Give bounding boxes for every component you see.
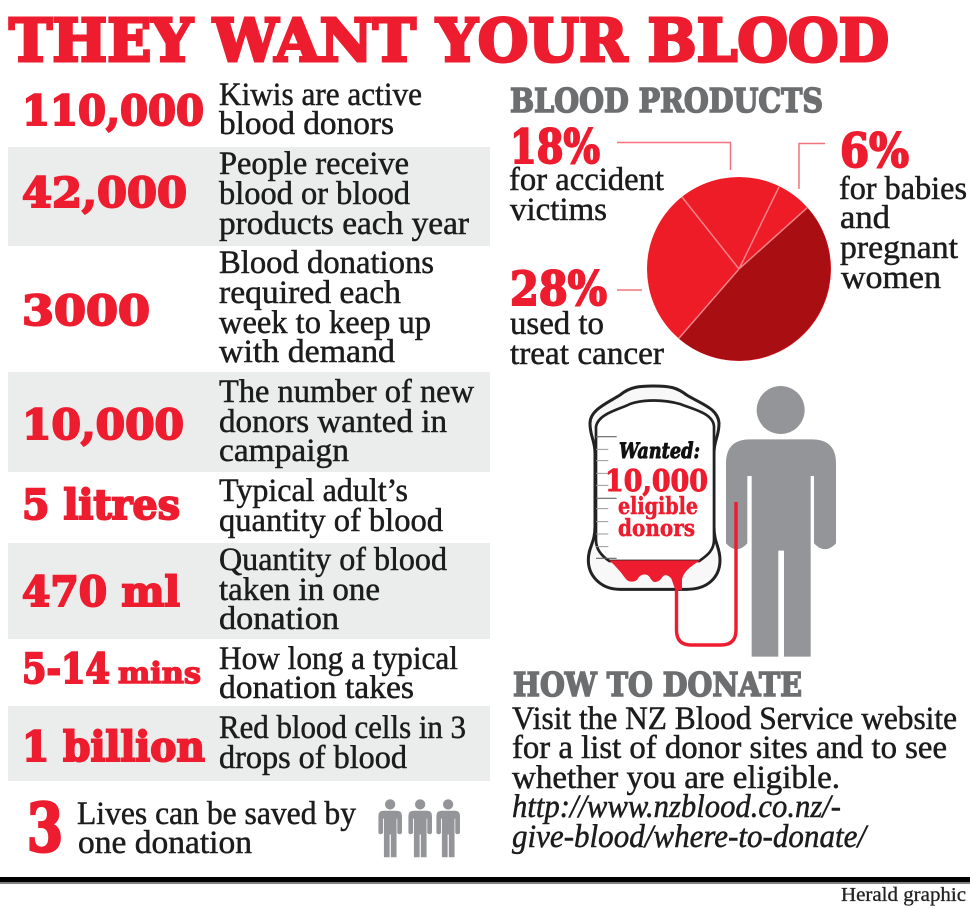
stat: new donors: The number of new: [219, 374, 474, 410]
stat: donation time: [22, 641, 458, 706]
donation instructions: for a list of donor sites and to see: [512, 730, 947, 766]
donation instructions: [512, 701, 957, 855]
callout: 28 percent: [510, 262, 664, 372]
callout: 6 percent: for babies: [839, 171, 967, 207]
stat: adult blood quantity: quantity of blood: [219, 503, 443, 539]
pie chart: [647, 177, 831, 361]
stat: lives saved: 3: [27, 789, 63, 867]
stat: adult blood quantity: 5 litres: [22, 481, 180, 529]
callout: 6 percent: women: [841, 260, 941, 296]
icon: blood bag: [588, 386, 720, 590]
blood tube: [676, 502, 736, 645]
callout: 6 percent: [799, 124, 967, 296]
stat: recipients: [8, 146, 490, 246]
stat: new donors: campaign: [219, 433, 349, 469]
callout: 28 percent: 28%: [510, 262, 607, 317]
callout: 6 percent: and: [840, 200, 891, 236]
callout: 6 percent: 6%: [840, 124, 909, 179]
stat: recipients: products each year: [219, 206, 469, 242]
heading: blood products: BLOOD PRODUCTS: [510, 81, 823, 120]
stat: red blood cells: 1 billion: [22, 723, 205, 771]
donation instructions: http://www.nzblood.co.nz/-: [512, 789, 841, 825]
stat: new donors: 10,000: [22, 401, 184, 449]
heading: how to donate: HOW TO DONATE: [513, 665, 802, 704]
stat: active donors: blood donors: [219, 106, 394, 142]
callout: 18 percent: victims: [510, 192, 607, 228]
bag label: Wanted:: [619, 438, 700, 463]
stat: lives saved: one donation: [78, 825, 252, 861]
stat: red blood cells: drops of blood: [219, 740, 407, 776]
stat: donation quantity: 470 ml: [22, 568, 180, 616]
stat: recipients: 42,000: [22, 169, 187, 217]
stat: recipients: People receive: [219, 146, 409, 182]
stat: weekly donations: with demand: [219, 334, 396, 370]
callout: 18 percent: 18%: [510, 120, 600, 175]
bag label: [605, 438, 708, 542]
stat: adult blood quantity: [22, 473, 443, 539]
callout: 28 percent: used to: [510, 306, 604, 342]
stat: donation quantity: Quantity of blood: [219, 542, 447, 578]
panel: how to donate: [512, 665, 957, 855]
stat: donation time: mins: [118, 656, 201, 690]
stat: donation quantity: [8, 542, 490, 639]
stat: adult blood quantity: Typical adult’s: [219, 473, 408, 509]
stat: weekly donations: [22, 245, 434, 370]
stat: active donors: Kiwis are active: [219, 77, 422, 113]
donation instructions: Visit the NZ Blood Service website: [512, 701, 957, 737]
credit: Herald graphic: [841, 884, 966, 906]
callout: 18 percent: [509, 120, 730, 228]
stat: weekly donations: week to keep up: [219, 305, 431, 341]
stat: red blood cells: Red blood cells in 3: [219, 710, 466, 746]
stat: new donors: [8, 372, 490, 472]
stat: donation quantity: taken in one: [219, 572, 380, 608]
panel: blood statistics: [8, 77, 490, 867]
title: THEY WANT YOUR BLOOD: [9, 6, 889, 75]
illustration: donor and blood bag: [588, 386, 836, 657]
bag label: eligible: [618, 493, 698, 520]
stat: weekly donations: Blood donations: [219, 245, 434, 281]
stat: recipients: blood or blood: [219, 176, 410, 212]
stat: active donors: [22, 77, 422, 142]
callout: 6 percent: pregnant: [840, 230, 958, 266]
stat: active donors: 110,000: [22, 87, 204, 135]
stat: donation time: 5-14: [22, 645, 110, 693]
panel: blood products: [509, 81, 967, 372]
stat: lives saved: [27, 789, 460, 867]
icon: person: [726, 386, 836, 657]
stat: donation time: How long a typical: [219, 641, 458, 677]
icon: three people: [378, 799, 460, 857]
stat: red blood cells: [8, 706, 490, 781]
bag label: donors: [618, 515, 695, 542]
bag label: 10,000: [605, 464, 708, 499]
stat: donation quantity: donation: [219, 601, 339, 637]
callout: 18 percent: for accident: [509, 162, 664, 198]
stat: new donors: donors wanted in: [219, 404, 447, 440]
stat: lives saved: Lives can be saved by: [77, 796, 356, 832]
donation instructions: give-blood/where-to-donate/: [512, 819, 869, 855]
stat: weekly donations: required each: [219, 275, 402, 311]
stat: donation time: donation takes: [219, 670, 414, 706]
callout: 28 percent: treat cancer: [510, 336, 664, 372]
donation instructions: whether you are eligible.: [512, 760, 840, 796]
stat: weekly donations: 3000: [22, 287, 150, 335]
